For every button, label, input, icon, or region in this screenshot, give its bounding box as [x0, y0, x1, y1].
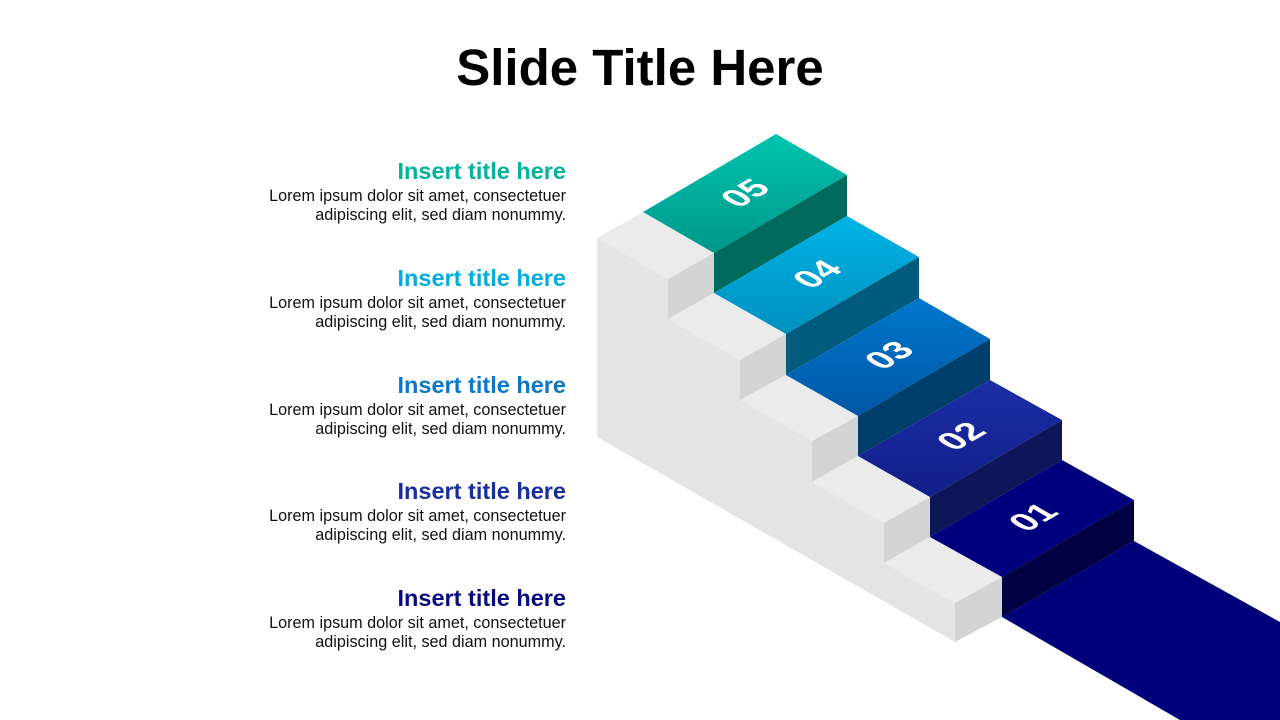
title: Slide Title Here — [456, 39, 824, 96]
text block: step 03: Insert title here — [398, 372, 566, 398]
text block: step 03 — [269, 372, 566, 438]
step 04 — [714, 216, 919, 375]
text block: step 05: Insert title here — [398, 158, 566, 184]
text block: step 01: Insert title here — [398, 585, 566, 611]
step 02: 02 — [928, 417, 995, 456]
floor strip — [1002, 541, 1280, 720]
text block: step 03: Lorem ipsum dolor sit amet, consectetuer — [269, 401, 566, 419]
text block: step 02: Insert title here — [398, 478, 566, 504]
text block: step 05: Lorem ipsum dolor sit amet, consectetuer — [269, 187, 566, 205]
step 05: 05 — [712, 174, 779, 213]
step 01 — [930, 460, 1134, 617]
text block: step 02 — [269, 478, 566, 544]
step 04: 04 — [784, 255, 852, 294]
text block: step 05 — [269, 158, 566, 224]
text block: step 04: adipiscing elit, sed diam nonummy. — [315, 313, 566, 331]
text block: step 01: Lorem ipsum dolor sit amet, consectetuer — [269, 614, 566, 632]
text block: step 01: adipiscing elit, sed diam nonummy. — [315, 633, 566, 651]
text block: step 01 — [269, 585, 566, 651]
text block: step 04: Lorem ipsum dolor sit amet, consectetuer — [269, 294, 566, 312]
step 05 — [643, 134, 847, 293]
step 03: 03 — [856, 336, 923, 375]
text block: step 03: adipiscing elit, sed diam nonummy. — [315, 420, 566, 438]
text block: step 04 — [269, 265, 566, 331]
white block — [597, 212, 1002, 642]
text block: step 04: Insert title here — [398, 265, 566, 291]
text block: step 02: adipiscing elit, sed diam nonummy. — [315, 526, 566, 544]
step 02 — [858, 380, 1062, 537]
step 01: 01 — [1000, 498, 1067, 537]
text block: step 02: Lorem ipsum dolor sit amet, consectetuer — [269, 507, 566, 525]
text block: step 05: adipiscing elit, sed diam nonummy. — [315, 206, 566, 224]
step 03 — [786, 298, 990, 456]
